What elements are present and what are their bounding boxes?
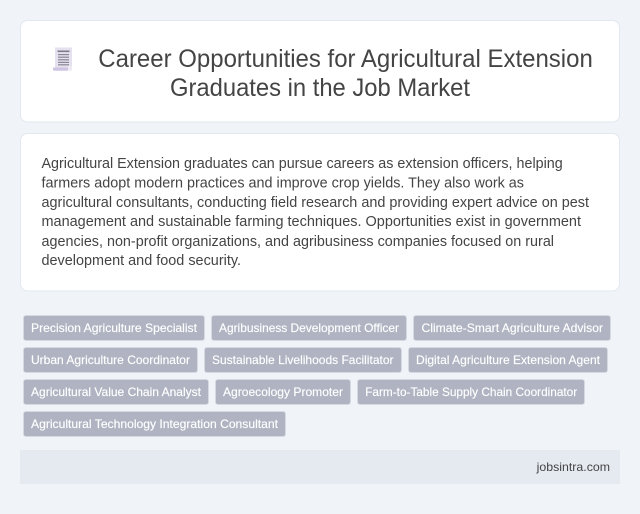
tag: Sustainable Livelihoods Facilitator xyxy=(212,353,394,367)
text block: description: management and sustainable farming techniques. Opportunities exist in government xyxy=(42,214,581,230)
tag: Agricultural Technology Integration Consultant xyxy=(31,417,279,431)
tag: Urban Agriculture Coordinator xyxy=(31,353,190,367)
tag xyxy=(216,380,350,404)
tag xyxy=(24,412,286,436)
title xyxy=(98,45,593,102)
tag xyxy=(204,348,402,372)
tag: Digital Agriculture Extension Agent xyxy=(416,353,601,367)
tag xyxy=(358,380,584,404)
tag: Agribusiness Development Officer xyxy=(219,321,399,335)
text block: description: farmers adopt modern practices and improve crop yields. They also work as xyxy=(42,176,524,192)
tag xyxy=(212,316,406,340)
footer source text: jobsintra.com xyxy=(536,460,610,474)
tag xyxy=(408,348,608,372)
text block: description: development and food security. xyxy=(42,253,241,269)
panel: header xyxy=(20,20,620,122)
title: Career Opportunities for Agricultural Extension xyxy=(98,45,593,73)
tag: Farm-to-Table Supply Chain Coordinator xyxy=(365,385,577,399)
text block: description: agricultural consultants, conducting field research and providing expert advice on pest xyxy=(42,195,589,211)
icon: document scroll xyxy=(53,48,72,71)
panel: career tags xyxy=(24,316,610,436)
text block: description: Agricultural Extension graduates can pursue careers as extension officers, helping xyxy=(42,156,563,172)
tag xyxy=(24,348,198,372)
footer xyxy=(20,450,620,484)
title: Graduates in the Job Market xyxy=(170,74,470,102)
panel: description xyxy=(20,134,620,291)
tag xyxy=(24,380,208,404)
tag: Agricultural Value Chain Analyst xyxy=(31,385,202,399)
text block: description xyxy=(42,156,589,269)
tag: Climate-Smart Agriculture Advisor xyxy=(422,321,603,335)
tag: Agroecology Promoter xyxy=(223,385,343,399)
text block: description: agencies, non-profit organizations, and agribusiness companies focused on rural xyxy=(42,234,554,250)
tag xyxy=(24,316,204,340)
tag xyxy=(414,316,610,340)
tag: Precision Agriculture Specialist xyxy=(31,321,198,335)
